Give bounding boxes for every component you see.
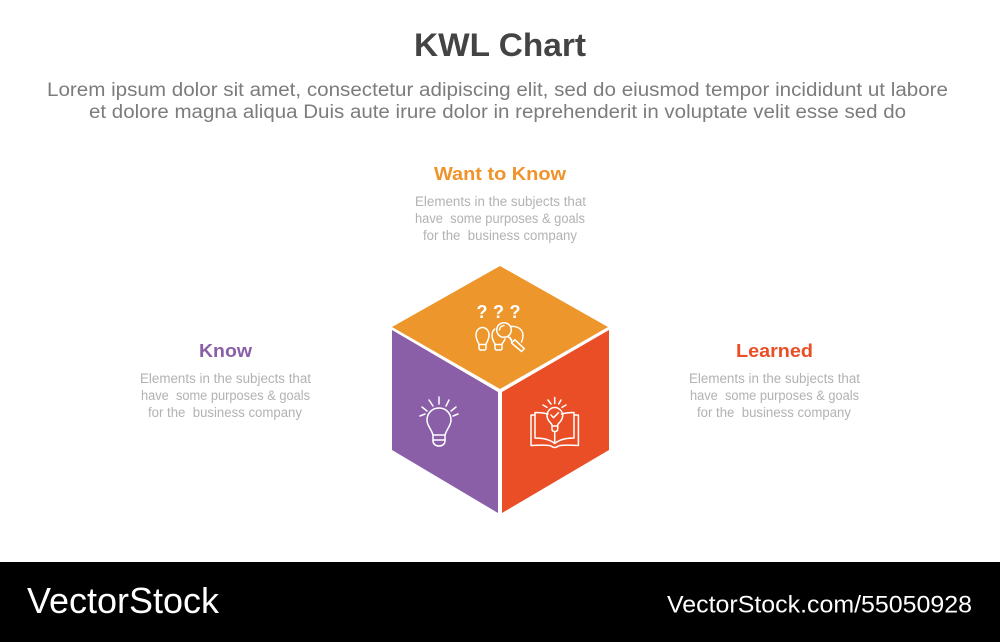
icon: question marks: ?	[493, 302, 504, 322]
text block: Want to Know: have some purposes & goals	[415, 211, 585, 226]
text block: Know	[140, 340, 311, 420]
cube face: want to know	[392, 266, 608, 389]
text block: Know: Know	[199, 340, 253, 361]
watermark logo: VectorStock	[27, 580, 220, 621]
text block: Know: Elements in the subjects that	[140, 371, 311, 386]
icon: light bulbs with magnifier	[476, 323, 524, 352]
intro paragraph: Lorem ipsum dolor sit amet, consectetur adipiscing elit, sed do eiusmod tempor incididunt ut labore	[47, 80, 948, 101]
watermark url: VectorStock.com/55050928	[667, 592, 972, 618]
icon: question marks: ?	[476, 302, 488, 322]
intro paragraph	[47, 80, 948, 123]
text block: Want to Know	[415, 163, 586, 243]
icon: open book with bulb	[531, 398, 578, 448]
text block: Learned	[689, 340, 860, 420]
text block: Want to Know: for the business company	[423, 228, 577, 243]
cube face: learned	[502, 330, 609, 513]
text block: Know: for the business company	[148, 405, 302, 420]
text block: Learned: Learned	[736, 340, 813, 361]
title: KWL Chart	[414, 27, 586, 63]
text block: Learned: have some purposes & goals	[690, 388, 859, 403]
cube diagram	[392, 266, 609, 513]
icon: question marks: ?	[510, 302, 520, 322]
text block: Want to Know: Want to Know	[434, 163, 567, 184]
cube face: know	[392, 330, 498, 513]
icon: light bulb	[420, 397, 458, 446]
text block: Want to Know: Elements in the subjects that	[415, 194, 586, 209]
text block: Know: have some purposes & goals	[141, 388, 310, 403]
watermark bar	[0, 562, 1000, 642]
intro paragraph: et dolore magna aliqua Duis aute irure dolor in reprehenderit in voluptate velit esse sed do	[89, 102, 906, 123]
text block: Learned: for the business company	[697, 405, 851, 420]
text block: Learned: Elements in the subjects that	[689, 371, 860, 386]
icon: question marks	[476, 302, 520, 322]
